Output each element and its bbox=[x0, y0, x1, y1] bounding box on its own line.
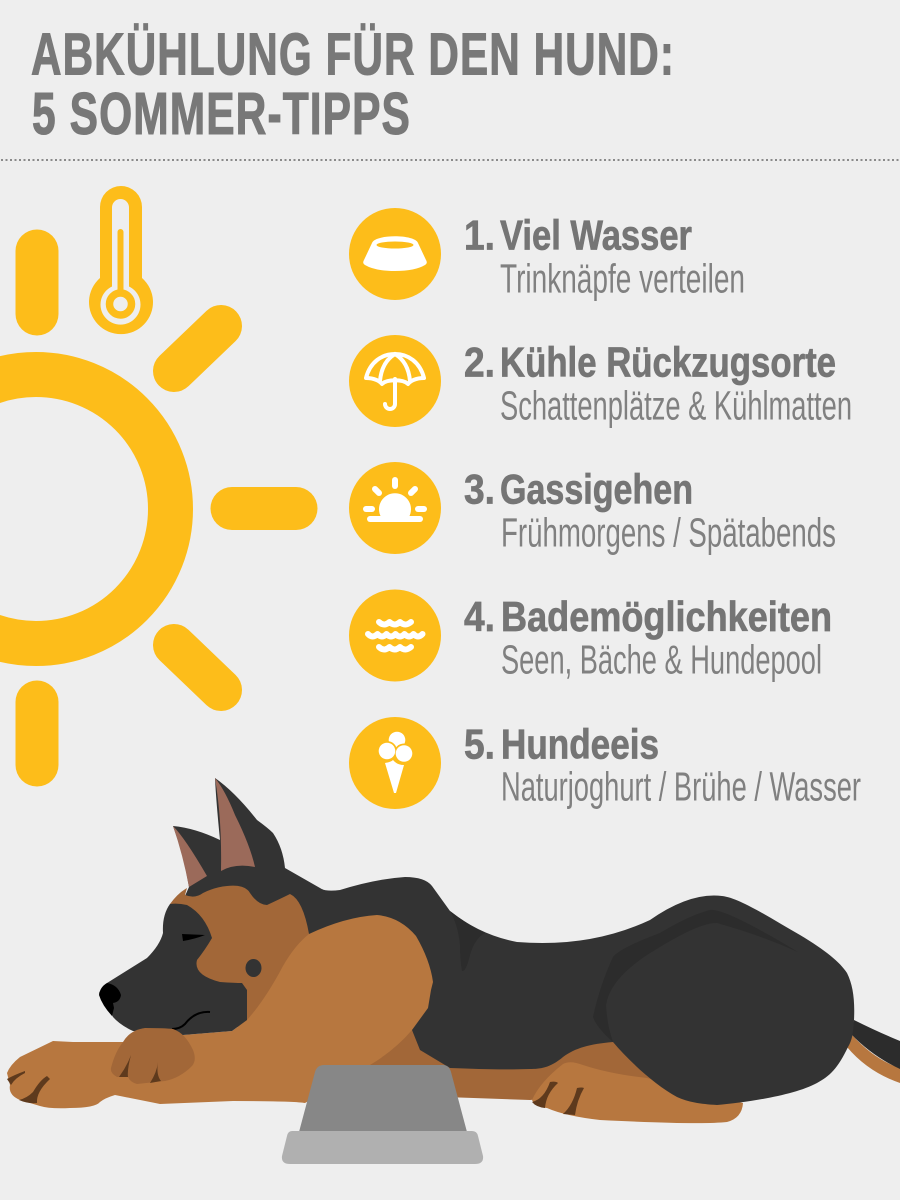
nose bbox=[99, 983, 121, 1016]
dog illustration bbox=[7, 778, 900, 1123]
icon: umbrella bbox=[349, 335, 441, 427]
foreleg bbox=[7, 915, 433, 1108]
tip 2: shade bbox=[349, 335, 852, 428]
bowl base bbox=[282, 1131, 483, 1164]
tip 1: water: Trinknäpfe verteilen bbox=[500, 256, 745, 302]
tip 1: water: Viel Wasser bbox=[500, 212, 692, 258]
tip 1: water bbox=[349, 208, 745, 302]
tip 4: bathing: Bademöglichkeiten bbox=[501, 593, 832, 640]
icon: waves bbox=[349, 590, 441, 682]
tail bbox=[847, 1020, 900, 1083]
tip 5: dog ice cream bbox=[349, 717, 861, 810]
tip 4: bathing: 4. bbox=[464, 593, 495, 640]
tip 3: walks: 3. bbox=[464, 466, 495, 512]
tip 2: shade: Kühle Rückzugsorte bbox=[500, 338, 836, 386]
tips list bbox=[349, 208, 861, 810]
title: 5 SOMMER-TIPPS bbox=[32, 81, 411, 147]
upper paw bbox=[111, 1028, 195, 1084]
icon: thermometer bbox=[89, 186, 153, 334]
tip 1: water: 1. bbox=[464, 212, 495, 258]
hip and neck fold shading bbox=[450, 910, 798, 1042]
tip 3: walks bbox=[349, 462, 836, 556]
water bowl bbox=[282, 1065, 483, 1164]
sun illustration bbox=[0, 251, 296, 765]
back paw bbox=[532, 1062, 743, 1123]
bowl body bbox=[299, 1065, 467, 1132]
eye bbox=[182, 934, 205, 941]
face mask bbox=[99, 904, 247, 1035]
tip 5: dog ice cream: 5. bbox=[464, 720, 495, 768]
tip 3: walks: Gassigehen bbox=[500, 466, 693, 512]
icon: ice cream bbox=[349, 717, 441, 809]
ears inner bbox=[173, 778, 255, 887]
icon: sunrise bbox=[349, 462, 441, 554]
dark body with ears bbox=[173, 778, 854, 1105]
mouth bbox=[172, 1012, 210, 1029]
title bbox=[31, 22, 675, 147]
ear spot bbox=[246, 959, 262, 977]
tip 5: dog ice cream: Hundeeis bbox=[501, 720, 659, 768]
front paw claws bbox=[7, 1071, 50, 1103]
head tan patch bbox=[170, 886, 320, 1035]
tip 2: shade: 2. bbox=[464, 338, 495, 386]
icon: bowl bbox=[349, 208, 441, 300]
belly shadow bbox=[340, 1000, 680, 1100]
tip 4: bathing bbox=[349, 590, 832, 682]
